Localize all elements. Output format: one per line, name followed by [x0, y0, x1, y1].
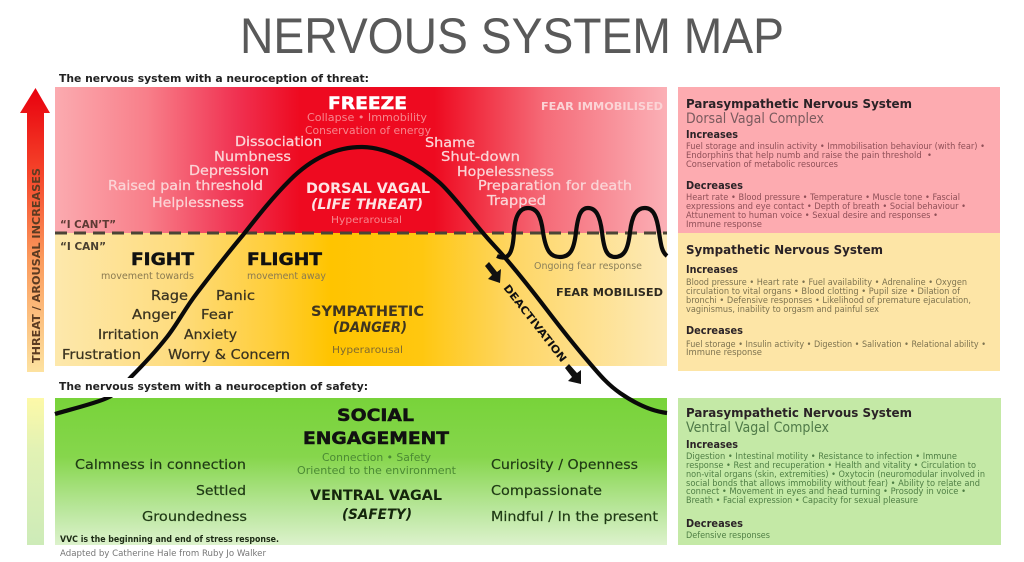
decreases list: Decreases [686, 518, 743, 530]
left safety states: Calmness in connection [75, 458, 246, 473]
nervous system response curve [55, 147, 667, 414]
fight and flight zone text [60, 240, 663, 363]
fear mobilised label: FEAR MOBILISED [556, 286, 663, 299]
ventral vagal label: (SAFETY) [342, 507, 412, 523]
flight states: Anxiety [184, 328, 237, 343]
right freeze states: Preparation for death [478, 179, 632, 194]
social engagement subtitle: Connection • Safety [322, 452, 431, 464]
panel heading: Sympathetic Nervous System [686, 242, 883, 257]
increases list: social bonds that allows immobility without fear) • Ability to relate and [686, 479, 980, 489]
panel heading: Parasympathetic Nervous System [686, 405, 912, 420]
left freeze states: Helplessness [152, 196, 244, 211]
fight heading: movement towards [101, 271, 194, 282]
sympathetic label [311, 304, 424, 356]
panel: ventral vagal complex [678, 398, 1001, 545]
right safety states [491, 458, 658, 525]
fight states: Frustration [62, 348, 141, 363]
flight states: Panic [216, 289, 255, 304]
panel heading [686, 96, 912, 127]
decreases list [686, 518, 771, 541]
increases list: Increases [686, 129, 738, 141]
ongoing fear response wave [497, 208, 667, 258]
social engagement subtitle [297, 452, 456, 477]
increases list: Fuel storage and insulin activity • Immobilisation behaviour (with fear) • [686, 142, 985, 152]
increases list: Conservation of metabolic resources [686, 160, 839, 170]
increases list: Increases [686, 264, 738, 276]
fight heading [101, 250, 194, 282]
increases list: Digestion • Intestinal motility • Resistance to infection • Immune [686, 452, 957, 462]
ventral vagal label [310, 488, 442, 523]
dorsal vagal label: DORSAL VAGAL [306, 181, 430, 197]
flight heading: FLIGHT [247, 250, 322, 270]
deactivation label and arrows [485, 262, 581, 384]
left safety states [75, 458, 247, 525]
sympathetic label: Hyperarousal [332, 345, 403, 356]
flight states: Worry & Concern [168, 348, 290, 363]
I can label: “I CAN” [60, 240, 106, 253]
freeze subtitle: Collapse • Immobility [307, 112, 427, 124]
dorsal vagal label: Hyperarousal [331, 215, 402, 226]
freeze subtitle: Conservation of energy [305, 125, 431, 137]
social engagement subtitle: Oriented to the environment [297, 465, 456, 477]
decreases list: Immune response [686, 348, 762, 358]
fight states: Anger [132, 308, 177, 323]
right freeze states [425, 136, 632, 209]
increases list: response • Rest and recuperation • Health and vitality • Circulation to [686, 461, 976, 471]
arrow: threat / arousal increases [20, 88, 50, 372]
panel: sympathetic nervous system [678, 233, 1000, 371]
arrow: threat / arousal increases: THREAT / AROUSAL INCREASES [31, 168, 43, 363]
increases list: connect • Movement in eyes and head turning • Prosody in voice • [686, 487, 966, 497]
increases list: vaginismus, inability to orgasm and painful sex [686, 305, 879, 315]
panel heading [686, 405, 912, 436]
right safety states: Curiosity / Openness [491, 458, 638, 473]
decreases list [686, 325, 986, 358]
left freeze states [108, 135, 322, 211]
increases list: bronchi • Defensive responses • Likelihood of premature ejaculation, [686, 296, 971, 306]
ongoing fear response label: Ongoing fear response [534, 261, 642, 272]
dorsal vagal label: (LIFE THREAT) [311, 197, 423, 213]
fight states [62, 289, 188, 363]
decreases list: Fuel storage • Insulin activity • Digestion • Salivation • Relational ability • [686, 340, 986, 350]
freeze subtitle [305, 112, 431, 137]
right freeze states: Hopelessness [457, 165, 554, 180]
freeze heading: FREEZE [328, 94, 407, 114]
left freeze states: Raised pain threshold [108, 179, 263, 194]
increases list: non-vital organs (skin, extremities) • Oxytocin (neuromodular involved in [686, 470, 985, 480]
increases list: circulation to vital organs • Blood clotting • Pupil size • Dilation of [686, 287, 961, 297]
right freeze states: Shame [425, 136, 475, 151]
sympathetic label: (DANGER) [333, 320, 407, 336]
I can't label: “I CAN’T” [60, 218, 116, 231]
left safety states: Groundedness [142, 510, 247, 525]
panel: fight and flight zone [55, 233, 667, 366]
decreases list: Heart rate • Blood pressure • Temperature • Muscle tone • Fascial [686, 193, 960, 203]
fight heading: FIGHT [131, 250, 194, 270]
left safety states: Settled [196, 484, 246, 499]
ventral vagal label: VENTRAL VAGAL [310, 488, 442, 504]
left freeze states: Depression [189, 164, 269, 179]
credit: Adapted by Catherine Hale from Ruby Jo Walker [60, 549, 266, 559]
decreases list: Decreases [686, 180, 743, 192]
panel heading: Parasympathetic Nervous System [686, 96, 912, 111]
heading: safety: The nervous system with a neuroception of safety: [59, 380, 368, 393]
decreases list: Immune response [686, 220, 762, 230]
decreases list: Attunement to human voice • Sexual desire and responses • [686, 211, 938, 221]
sympathetic label: SYMPATHETIC [311, 304, 424, 320]
right safety states: Mindful / In the present [491, 510, 658, 525]
panel: dorsal vagal complex [678, 87, 1000, 233]
right freeze states: Trapped [486, 194, 546, 209]
safety scale bar [27, 398, 44, 545]
increases list: Blood pressure • Heart rate • Fuel availability • Adrenaline • Oxygen [686, 278, 967, 288]
decreases list: Decreases [686, 325, 743, 337]
flight heading [247, 250, 326, 282]
heading: safety [55, 378, 371, 397]
freeze zone text [60, 94, 663, 231]
VVC note: VVC is the beginning and end of stress response. [60, 535, 279, 545]
threshold dashed line [55, 232, 667, 234]
right freeze states: Shut-down [441, 150, 520, 165]
title: NERVOUS SYSTEM MAP [240, 8, 784, 64]
fight states: Irritation [98, 328, 159, 343]
panel heading: Ventral Vagal Complex [686, 420, 829, 436]
decreases list [686, 180, 966, 230]
decreases list: expressions and eye contact • Depth of breath • Social behaviour • [686, 202, 966, 212]
left freeze states: Dissociation [235, 135, 322, 150]
flight heading: movement away [247, 271, 326, 282]
increases list [686, 439, 985, 506]
increases list [686, 129, 985, 170]
panel: social engagement zone [55, 398, 667, 545]
dorsal vagal label [306, 181, 430, 226]
left freeze states: Numbness [214, 150, 291, 165]
flight states [168, 289, 290, 363]
increases list: Breath • Facial expression • Capacity for sexual pleasure [686, 496, 918, 506]
increases list: Endorphins that help numb and raise the pain threshold • [686, 151, 932, 161]
social engagement heading [303, 406, 449, 449]
social engagement heading: ENGAGEMENT [303, 429, 449, 449]
increases list [686, 264, 971, 315]
fight states: Rage [151, 289, 188, 304]
social engagement zone text [60, 406, 658, 559]
social engagement heading: SOCIAL [337, 406, 414, 426]
increases list: Increases [686, 439, 738, 451]
right safety states: Compassionate [491, 484, 602, 499]
panel: freeze zone [55, 87, 667, 233]
deactivation label and arrows: DEACTIVATION [501, 282, 569, 365]
heading: threat: The nervous system with a neuroception of threat: [59, 72, 369, 85]
decreases list: Defensive responses [686, 531, 771, 541]
fear immobilised label: FEAR IMMOBILISED [541, 100, 663, 113]
flight states: Fear [201, 308, 234, 323]
panel heading: Dorsal Vagal Complex [686, 111, 824, 127]
